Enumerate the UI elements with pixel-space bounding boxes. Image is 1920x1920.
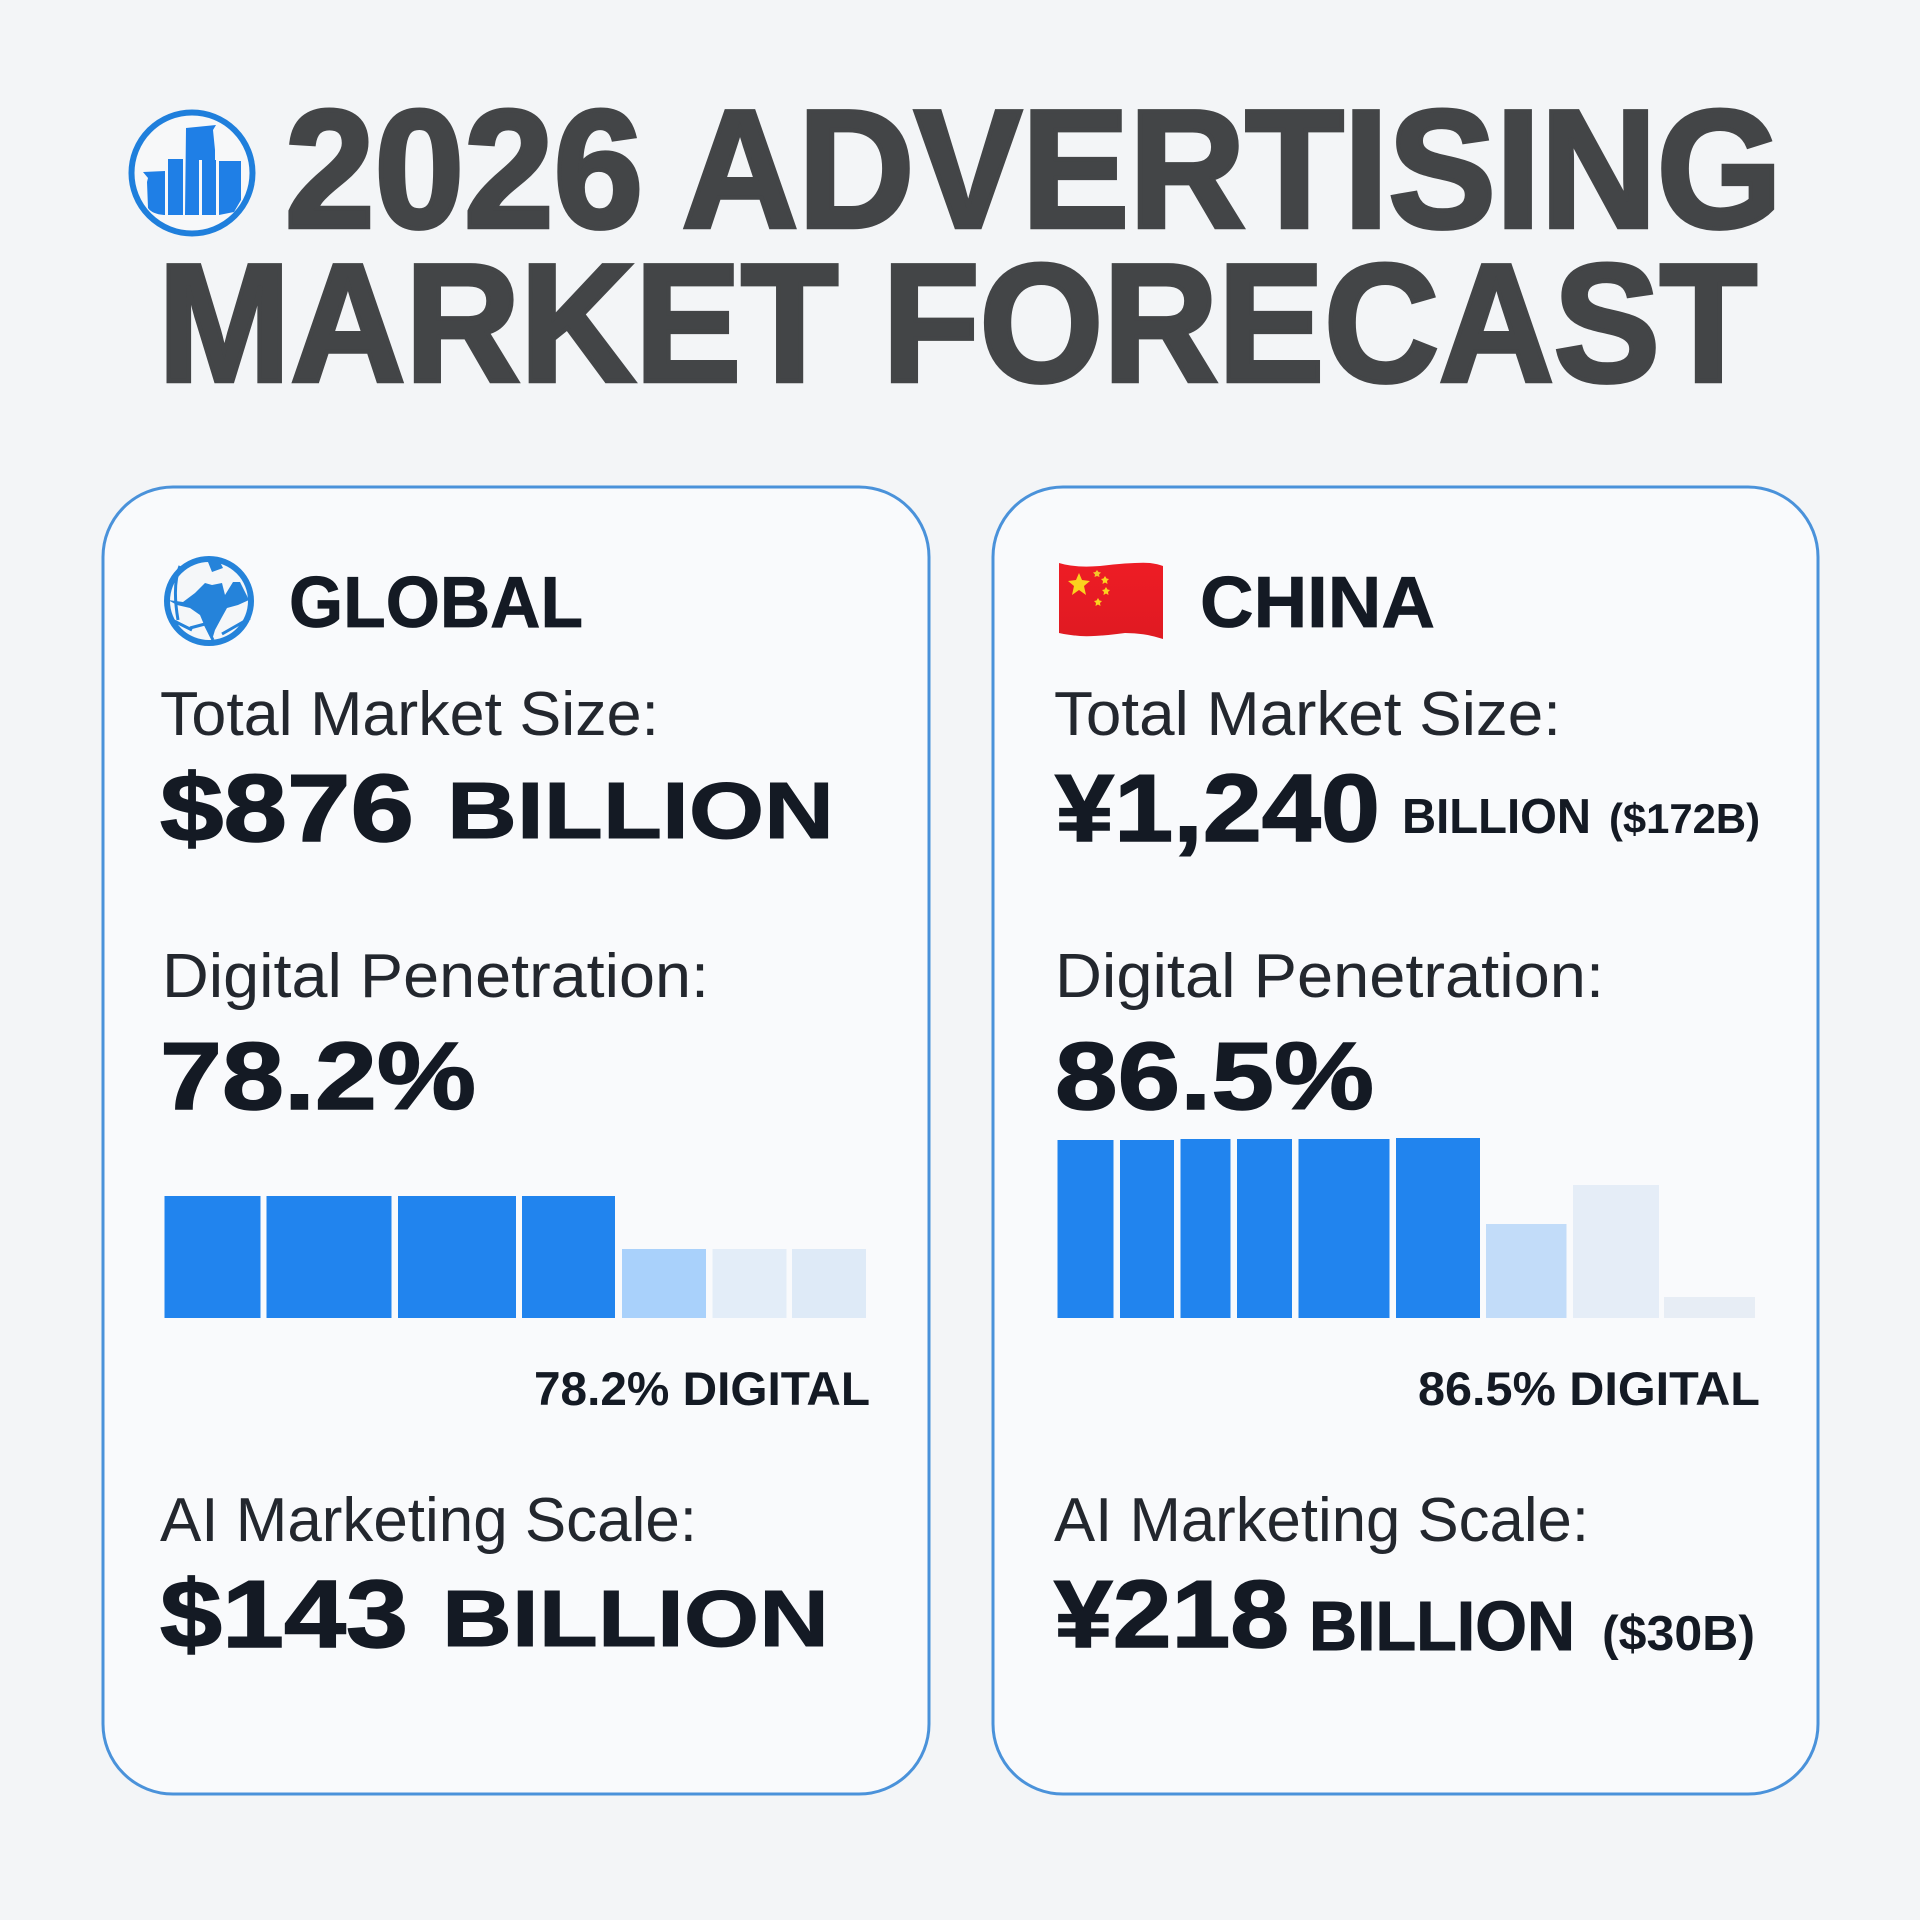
total market size value: ¥1,240	[1055, 755, 1380, 862]
digital share caption: 86.5% DIGITAL	[1418, 1362, 1760, 1415]
digital penetration value: 86.5%	[1055, 1023, 1374, 1130]
total market size label: Total Market Size:	[160, 680, 659, 749]
total market size label: Total Market Size:	[1054, 680, 1561, 749]
heading: global: GLOBAL	[289, 563, 583, 643]
total market size value	[160, 755, 834, 862]
digital penetration value: 78.2%	[160, 1023, 476, 1130]
ai marketing scale value: ($30B)	[1602, 1607, 1755, 1661]
ai marketing scale label: AI Marketing Scale:	[1054, 1486, 1589, 1555]
total market size value: ($172B)	[1609, 795, 1760, 842]
ai marketing scale value	[160, 1561, 829, 1668]
ai marketing scale value	[1054, 1561, 1755, 1668]
bar chart: global digital share	[164, 1196, 866, 1318]
ai marketing scale value: BILLION	[1309, 1587, 1575, 1665]
icon: globe	[167, 558, 251, 643]
total market size value	[1055, 755, 1760, 862]
panel: global	[103, 487, 929, 1794]
ai marketing scale value: ¥218	[1054, 1561, 1289, 1668]
total market size value: BILLION	[1402, 790, 1591, 844]
ai marketing scale label: AI Marketing Scale:	[160, 1486, 697, 1555]
ai marketing scale value: BILLION	[442, 1574, 829, 1663]
digital penetration label: Digital Penetration:	[1055, 942, 1604, 1011]
title	[158, 75, 1782, 417]
ai marketing scale value: $143	[160, 1561, 408, 1668]
heading: china: CHINA	[1200, 563, 1435, 643]
digital penetration label: Digital Penetration:	[162, 942, 709, 1011]
total market size value: $876	[160, 755, 414, 862]
panel: china	[993, 487, 1818, 1794]
title icon: bar chart in a circle	[132, 112, 252, 234]
digital share caption: 78.2% DIGITAL	[534, 1362, 870, 1415]
title: 2026 ADVERTISING	[285, 75, 1782, 263]
icon: china flag	[1059, 563, 1163, 639]
total market size value: BILLION	[447, 766, 834, 855]
bar chart: china digital share	[1058, 1138, 1755, 1318]
title: MARKET FORECAST	[158, 229, 1757, 417]
